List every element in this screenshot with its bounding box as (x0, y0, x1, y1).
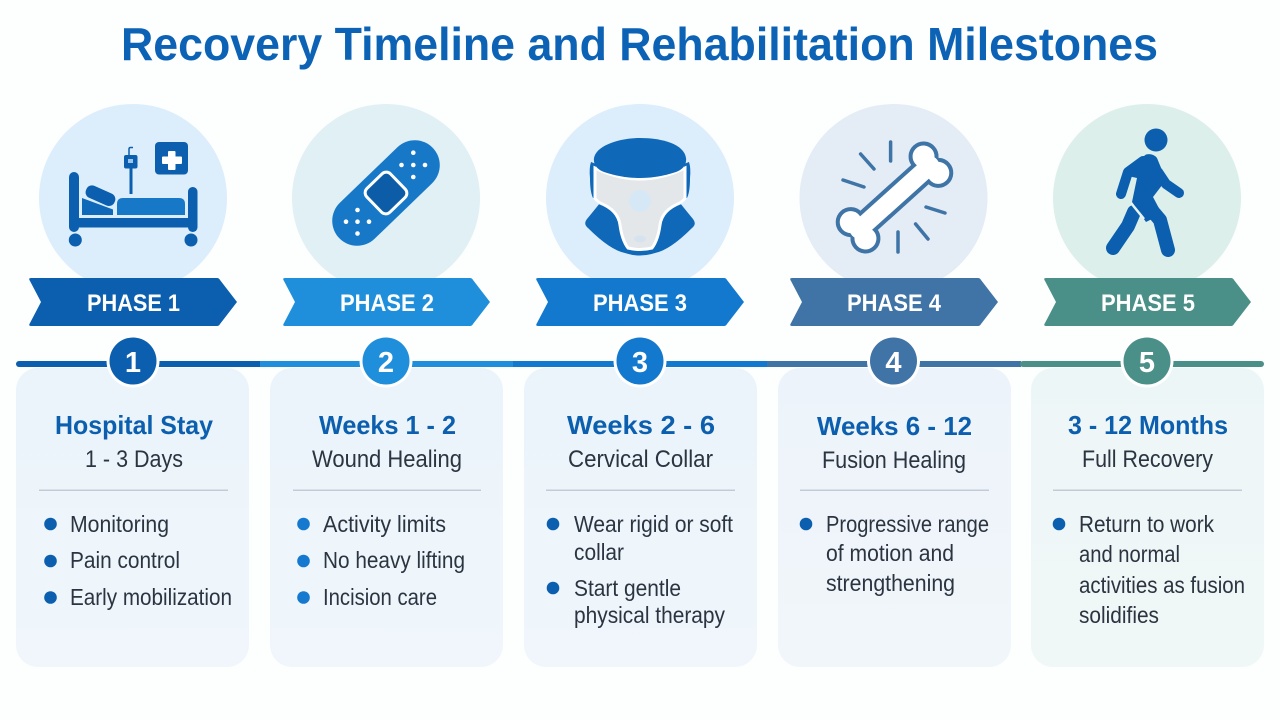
panel: phase 5 card (1031, 368, 1264, 667)
banner: phase 5 (1044, 278, 1251, 326)
marker: step 3: 3 (632, 347, 648, 379)
card 5 subtitle: Full Recovery (1082, 446, 1213, 473)
icon: cervical collar (585, 138, 695, 256)
marker: step 1 (106, 334, 160, 388)
card 2 bullets: Activity limits (323, 511, 446, 537)
panel: phase 3 card (524, 368, 757, 667)
card 4 bullets: strengthening (826, 570, 955, 596)
title: Recovery Timeline and Rehabilitation Milestones (121, 18, 1158, 70)
timeline bar (16, 361, 1264, 367)
card 4 heading: Weeks 6 - 12 (817, 411, 972, 441)
card 3 heading: Weeks 2 - 6 (567, 410, 715, 440)
banner: phase 4 (790, 278, 998, 326)
card 3 bullets: Start gentle (574, 575, 681, 601)
panel: phase 4 card (778, 368, 1011, 667)
marker: step 4: 4 (885, 347, 902, 379)
banner: phase 5: PHASE 5 (1101, 290, 1195, 317)
marker: step 3 (614, 334, 666, 388)
marker: step 4 (867, 334, 920, 388)
card 3 bullets: collar (574, 539, 624, 565)
card 1 bullets: Early mobilization (70, 584, 232, 610)
card 1 subtitle: 1 - 3 Days (85, 446, 183, 473)
marker: step 2: 2 (378, 347, 394, 379)
card 4 bullets: Progressive range (826, 511, 989, 537)
icon: hospital bed (69, 142, 198, 246)
banner: phase 3 (536, 278, 744, 326)
card 1 bullets: Monitoring (70, 511, 169, 537)
icon: bone with rays (835, 141, 954, 254)
card 3 bullets: physical therapy (574, 602, 725, 628)
panel: phase 5 icon circle (1053, 104, 1241, 292)
panel: phase 2 icon circle (292, 104, 480, 292)
panel: phase 1 icon circle (39, 104, 227, 292)
card 2 bullets: Incision care (323, 584, 437, 610)
card 4 subtitle: Fusion Healing (822, 447, 966, 474)
icon: walking person (1113, 128, 1179, 250)
banner: phase 2 (283, 278, 490, 326)
card 5 bullets (1053, 511, 1245, 628)
card 5 heading: 3 - 12 Months (1068, 410, 1228, 440)
card 3 bullets: Wear rigid or soft (574, 511, 734, 537)
banner: phase 1 (29, 278, 237, 326)
card 2 heading: Weeks 1 - 2 (319, 410, 456, 440)
marker: step 5 (1120, 334, 1174, 388)
card 2 bullets (297, 511, 465, 610)
card 4 bullets: of motion and (826, 540, 954, 566)
card 5 bullets: activities as fusion (1079, 572, 1245, 598)
card 2 bullets: No heavy lifting (323, 547, 465, 573)
marker: step 2 (360, 334, 412, 388)
marker: step 5: 5 (1139, 347, 1155, 379)
card 3 bullets (547, 511, 734, 628)
banner: phase 1: PHASE 1 (87, 290, 180, 317)
card 5 bullets: Return to work (1079, 511, 1214, 537)
panel: phase 2 card (270, 368, 503, 667)
card 5 bullets: and normal (1079, 541, 1180, 567)
panel: phase 4 icon circle (800, 104, 988, 292)
panel: phase 1 card (16, 368, 249, 667)
card 1 bullets: Pain control (70, 547, 180, 573)
icon: adhesive bandage (322, 130, 450, 256)
card 2 subtitle: Wound Healing (312, 446, 462, 473)
card 5 bullets: solidifies (1079, 602, 1159, 628)
marker: step 1: 1 (125, 347, 141, 379)
card 1 heading: Hospital Stay (55, 410, 214, 440)
banner: phase 3: PHASE 3 (593, 290, 687, 317)
banner: phase 4: PHASE 4 (847, 290, 942, 317)
panel: phase 3 icon circle (546, 104, 734, 292)
card 4 bullets (800, 511, 989, 596)
card 3 subtitle: Cervical Collar (568, 446, 713, 473)
card 1 bullets (44, 511, 232, 610)
banner: phase 2: PHASE 2 (340, 290, 434, 317)
